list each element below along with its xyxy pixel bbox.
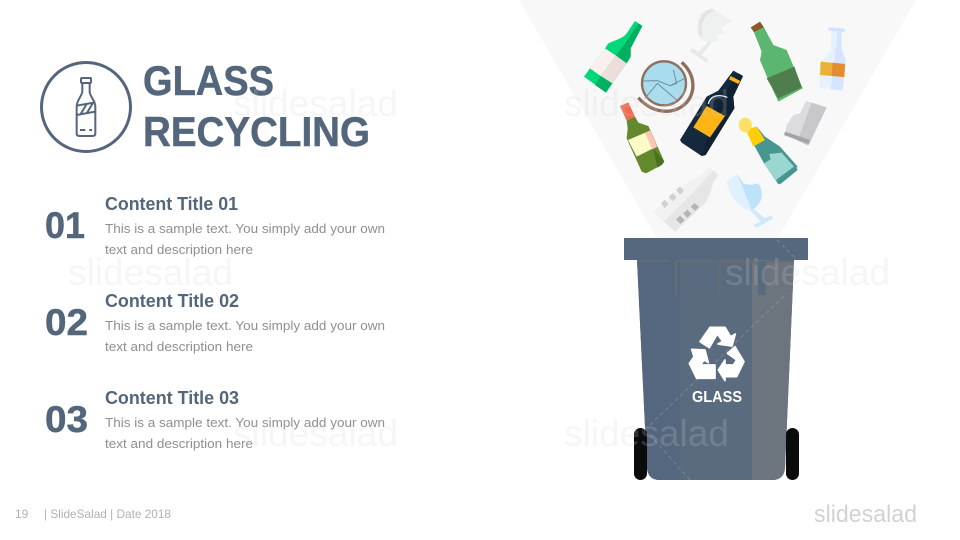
text 01: This is a sample text. You simply add your own	[105, 221, 385, 236]
text 02: text and description here	[105, 339, 253, 354]
icon: dark wine bottle with yellow label	[680, 71, 743, 156]
heading 02: Content Title 02	[105, 291, 239, 311]
number 01: 01	[45, 205, 85, 246]
number 03: 03	[45, 399, 88, 440]
text 03: text and description here	[105, 436, 253, 451]
item 03	[45, 388, 385, 451]
bottles falling into the bin	[584, 8, 846, 232]
icon: broken grey tumbler	[784, 101, 827, 146]
icon: small green bottle with cream label	[620, 102, 664, 173]
watermarks: slidesalad	[233, 83, 398, 124]
footer logo: slidesalad	[814, 501, 917, 528]
footer page number: 19	[15, 507, 29, 521]
watermarks: slidesalad	[725, 252, 890, 293]
text 02: This is a sample text. You simply add your own	[105, 318, 385, 333]
watermarks: slidesalad	[564, 83, 729, 124]
bin handles	[637, 260, 794, 295]
right wheel	[786, 428, 799, 480]
icon: broken wine glass, pale	[690, 8, 732, 63]
icon: broken blue wine glass	[727, 174, 773, 228]
light cone background	[519, 0, 916, 238]
text 01: text and description here	[105, 242, 253, 257]
icon: green bottle with white label	[584, 21, 642, 93]
icon: globe	[638, 61, 693, 111]
heading 03: Content Title 03	[105, 388, 239, 408]
title: GLASS	[143, 57, 274, 104]
bin body	[637, 260, 794, 480]
heading 01: Content Title 01	[105, 194, 238, 214]
icon: large green bottle	[751, 22, 803, 102]
text 03: This is a sample text. You simply add your own	[105, 415, 385, 430]
footer text: | SlideSalad | Date 2018	[44, 507, 171, 521]
icon: clear bottle with orange label	[819, 27, 846, 91]
icon: recycling symbol	[689, 327, 744, 381]
bin label: GLASS	[692, 389, 742, 406]
watermarks	[68, 83, 890, 454]
bin	[624, 238, 808, 480]
title: RECYCLING	[143, 108, 370, 155]
icon: clear plastic bottle, pale	[653, 167, 718, 232]
item 02	[45, 291, 385, 354]
watermarks: slidesalad	[233, 413, 398, 454]
watermarks: slidesalad	[564, 413, 729, 454]
item 01	[45, 194, 385, 257]
icon: champagne bottle	[739, 118, 798, 184]
number 02: 02	[45, 302, 88, 343]
watermarks: slidesalad	[68, 252, 233, 293]
left wheel	[634, 428, 647, 480]
icon: circled bottle	[42, 62, 130, 152]
bin lid	[624, 238, 808, 260]
